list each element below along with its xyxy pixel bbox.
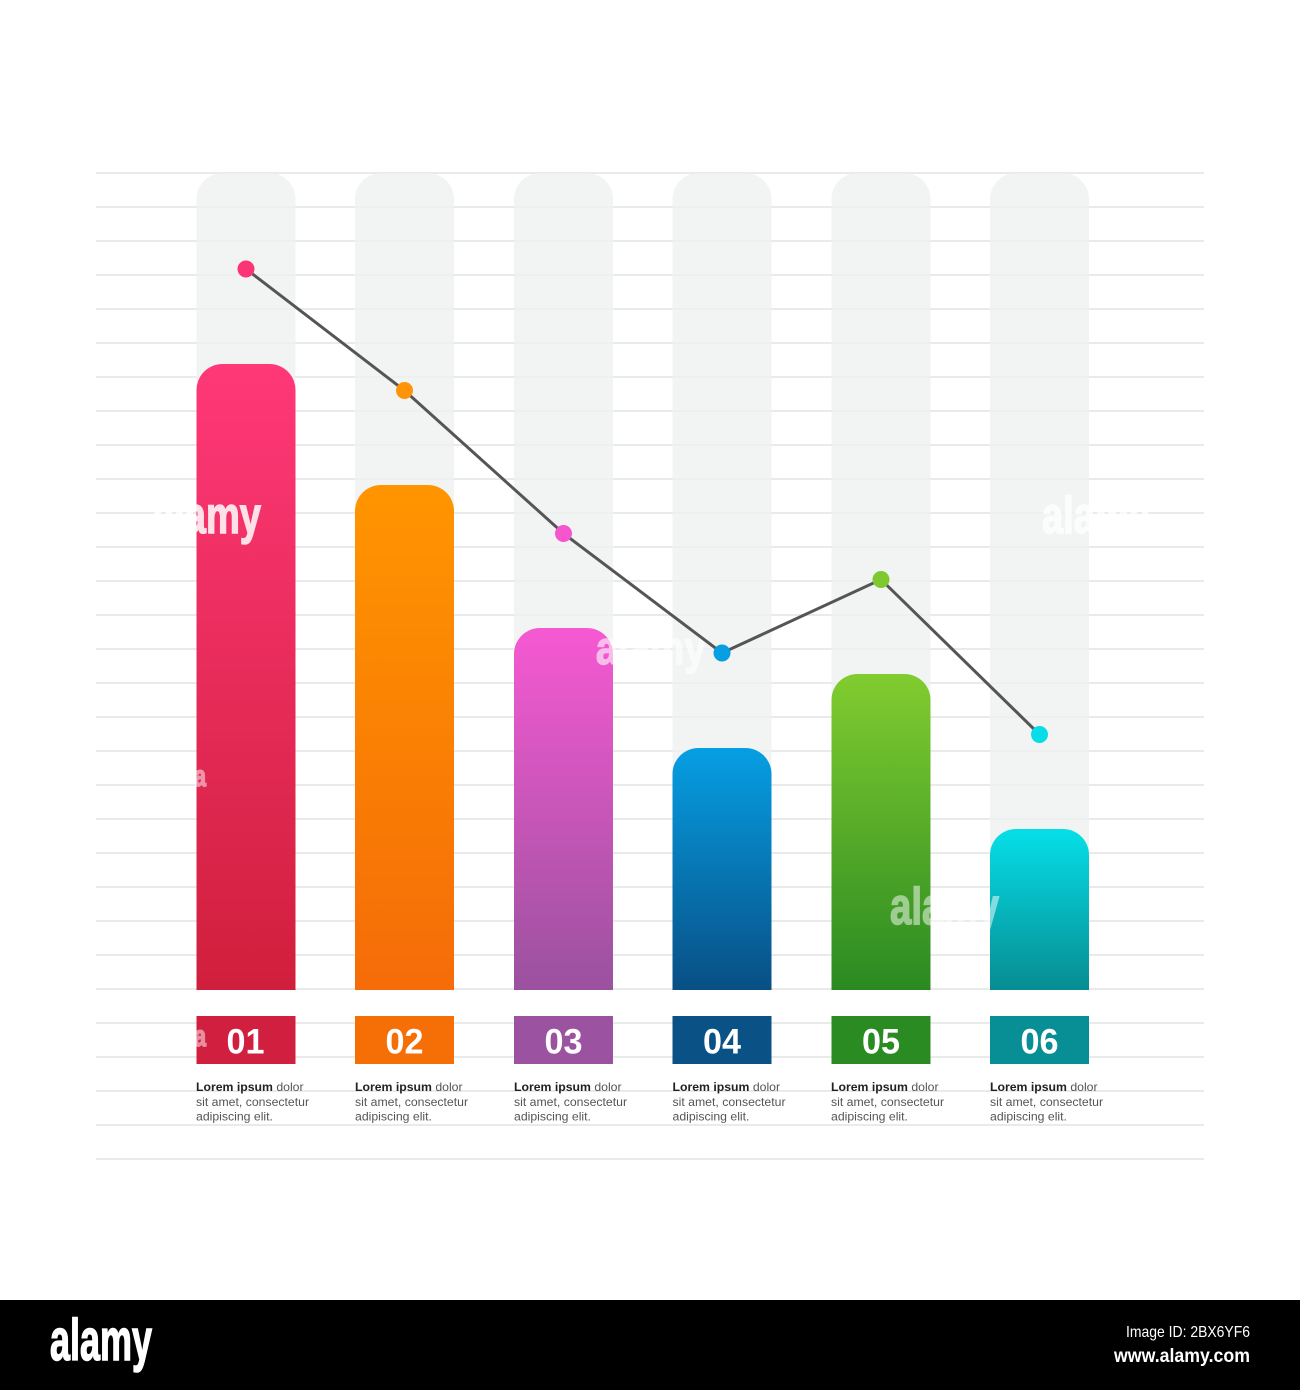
bar 04 xyxy=(672,748,772,990)
bar 06 xyxy=(990,829,1089,990)
bar 01 xyxy=(196,364,296,990)
point 06 xyxy=(1031,726,1048,743)
point 03 xyxy=(555,525,572,542)
point 01 xyxy=(238,260,254,278)
watermarks: alamy xyxy=(596,622,706,674)
descriptions xyxy=(196,1080,1103,1124)
label 02 xyxy=(355,1016,454,1064)
label 01 xyxy=(196,1016,296,1064)
watermarks: a xyxy=(194,1020,206,1053)
description 02: adipiscing elit. xyxy=(355,1110,432,1124)
description 01: sit amet, consectetur xyxy=(196,1095,309,1109)
footer logo: alamy xyxy=(50,1308,152,1373)
description 02: sit amet, consectetur xyxy=(355,1095,468,1109)
label 05: 05 xyxy=(862,1022,900,1062)
point 04 xyxy=(714,644,730,662)
label 03 xyxy=(514,1016,613,1064)
watermarks: a xyxy=(194,760,206,793)
watermarks: alamy xyxy=(890,878,999,936)
label 05 xyxy=(832,1016,930,1064)
label 02: 02 xyxy=(386,1022,424,1062)
website: www.alamy.com xyxy=(1113,1346,1250,1367)
watermarks: alamy xyxy=(1042,487,1150,545)
bar 03 xyxy=(514,628,613,990)
description 03: sit amet, consectetur xyxy=(514,1095,627,1109)
footer band xyxy=(0,1300,1300,1390)
description 03: adipiscing elit. xyxy=(514,1110,591,1124)
line chart xyxy=(238,260,1048,743)
bar chart: six coloured bars xyxy=(196,364,1089,990)
label 06: 06 xyxy=(1020,1022,1058,1062)
label 06 xyxy=(990,1016,1089,1064)
description 06: Lorem ipsum dolor xyxy=(990,1080,1098,1094)
description 05: sit amet, consectetur xyxy=(831,1095,944,1109)
description 04: Lorem ipsum dolor xyxy=(672,1080,780,1094)
bar background tracks xyxy=(196,173,1089,990)
description 03: Lorem ipsum dolor xyxy=(514,1080,622,1094)
description 05: Lorem ipsum dolor xyxy=(831,1080,939,1094)
point 02 xyxy=(396,382,413,399)
label 04: 04 xyxy=(703,1022,742,1062)
description 06: adipiscing elit. xyxy=(990,1110,1067,1124)
number labels xyxy=(196,1016,1089,1064)
description 02: Lorem ipsum dolor xyxy=(355,1080,463,1094)
bar 02 xyxy=(355,485,454,990)
description 06: sit amet, consectetur xyxy=(990,1095,1103,1109)
description 04: sit amet, consectetur xyxy=(672,1095,786,1109)
description 04: adipiscing elit. xyxy=(672,1110,749,1124)
bar 05 xyxy=(832,674,930,990)
label 01: 01 xyxy=(226,1022,264,1062)
watermarks xyxy=(153,487,1150,1053)
label 04 xyxy=(672,1016,772,1064)
description 01: adipiscing elit. xyxy=(196,1110,273,1124)
point 05 xyxy=(872,571,890,588)
watermarks: alamy xyxy=(153,487,261,545)
image id: Image ID: 2BX6YF6 xyxy=(1126,1324,1250,1341)
label 03: 03 xyxy=(544,1022,582,1062)
description 05: adipiscing elit. xyxy=(831,1110,908,1124)
description 01: Lorem ipsum dolor xyxy=(196,1080,304,1094)
